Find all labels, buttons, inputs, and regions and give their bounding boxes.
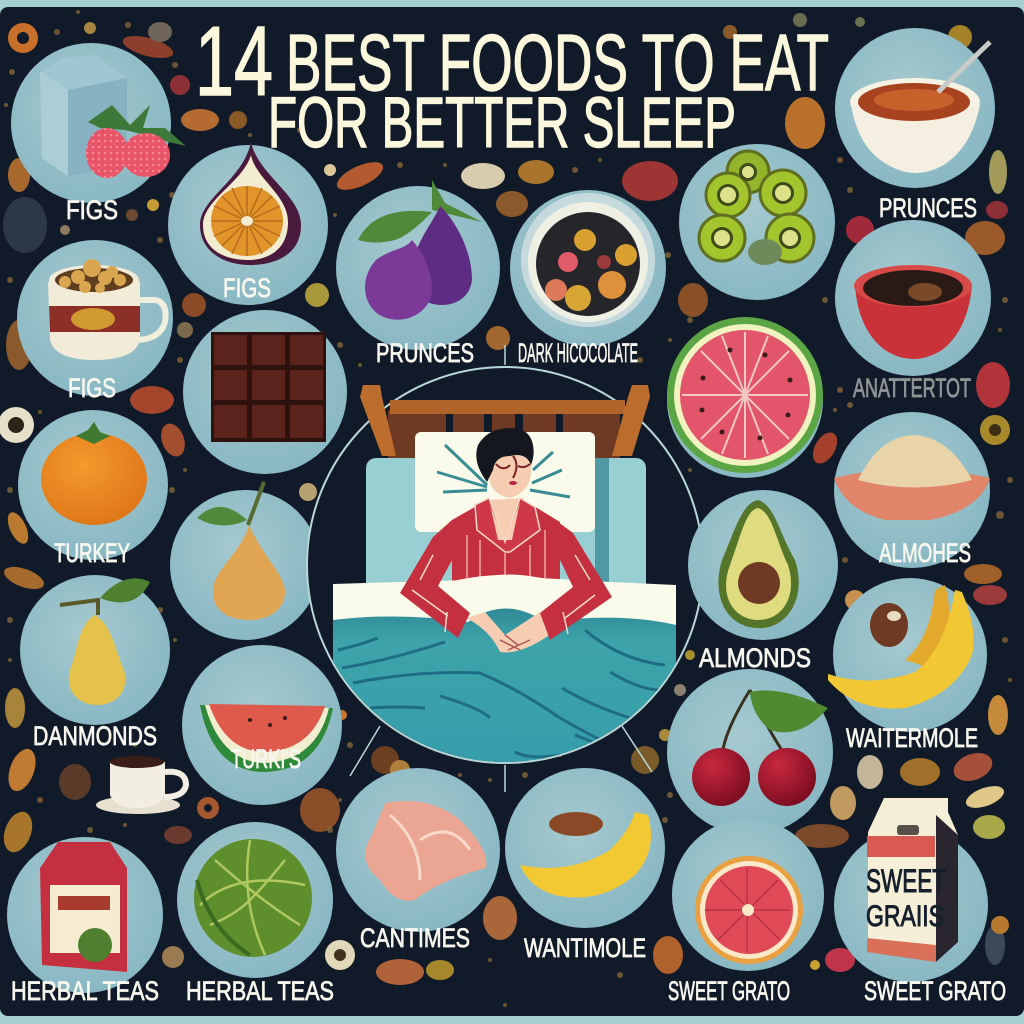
label: FIGS bbox=[68, 373, 116, 403]
panel: banana right bbox=[828, 578, 987, 732]
text on carton: GRAIIS bbox=[866, 900, 944, 933]
panel: cabbage bbox=[177, 822, 334, 1006]
pillow bbox=[415, 432, 595, 532]
panel: milk carton left bbox=[7, 837, 163, 1006]
panel: meat bbox=[336, 768, 500, 953]
panel: kiwi slices bbox=[679, 144, 835, 300]
panel: dried fruit bowl bbox=[510, 190, 666, 368]
panel: cherries bbox=[667, 669, 833, 835]
label: HERBAL TEAS bbox=[11, 976, 159, 1006]
label: CANTIMES bbox=[360, 923, 470, 953]
label: PRUNCES bbox=[879, 193, 977, 223]
panel: dried fruit bowl: DARK HICOCOLATE bbox=[518, 338, 638, 368]
label: FIGS bbox=[223, 273, 271, 303]
panel: grapefruit bbox=[668, 819, 824, 1006]
label: SWEET GRATO bbox=[668, 976, 790, 1006]
label: PRUNCES bbox=[376, 338, 474, 368]
text on carton: SWEET bbox=[866, 863, 946, 899]
panel: sleeping person bbox=[307, 367, 703, 780]
panel: soup bowl bbox=[835, 28, 995, 223]
panel: cup of nuts bbox=[17, 240, 173, 403]
panel: avocado bbox=[688, 490, 838, 673]
mattress bbox=[366, 458, 646, 628]
torso in red pajamas bbox=[452, 498, 560, 585]
bed headboard bbox=[360, 385, 650, 458]
blanket bbox=[333, 608, 676, 762]
label: waltermole: WAITERMOLE bbox=[846, 723, 978, 753]
label: TURKEY bbox=[54, 538, 130, 568]
panel: pudding bowl bbox=[834, 412, 990, 568]
panel: orange bbox=[18, 410, 168, 568]
label: TURKI'S bbox=[231, 744, 301, 774]
icon: coffee cup bbox=[96, 756, 186, 814]
arms and hands bbox=[400, 520, 612, 652]
white sheet fold bbox=[333, 574, 676, 625]
label: ALMONDS bbox=[699, 643, 811, 673]
label: FIGS bbox=[66, 195, 118, 225]
panel: red bowl bbox=[835, 220, 991, 403]
panel: watermelon slice bbox=[182, 645, 342, 805]
panel: fig bbox=[168, 142, 328, 305]
panel: carton and berries bbox=[11, 43, 186, 225]
panel: prunes bbox=[336, 180, 500, 368]
panel: yellow pear bbox=[20, 575, 170, 751]
panel: watermelon round bbox=[667, 317, 823, 478]
panel: pear bbox=[170, 482, 320, 640]
title: FOR BETTER SLEEP bbox=[268, 84, 736, 163]
pillow shadow bbox=[595, 458, 609, 583]
label: DANMONDS bbox=[33, 721, 157, 751]
head bbox=[437, 428, 570, 545]
panel: grains carton bbox=[834, 798, 1006, 1006]
text on carton bbox=[866, 863, 946, 933]
title: 14 bbox=[195, 6, 273, 116]
label: HERBAL TEAS bbox=[186, 976, 334, 1006]
label: WANTIMOLE bbox=[524, 933, 646, 963]
label: ALMOHES bbox=[879, 538, 971, 568]
panel: banana bottom bbox=[505, 768, 665, 963]
panel: chocolate bbox=[183, 310, 347, 474]
title bbox=[195, 6, 829, 163]
